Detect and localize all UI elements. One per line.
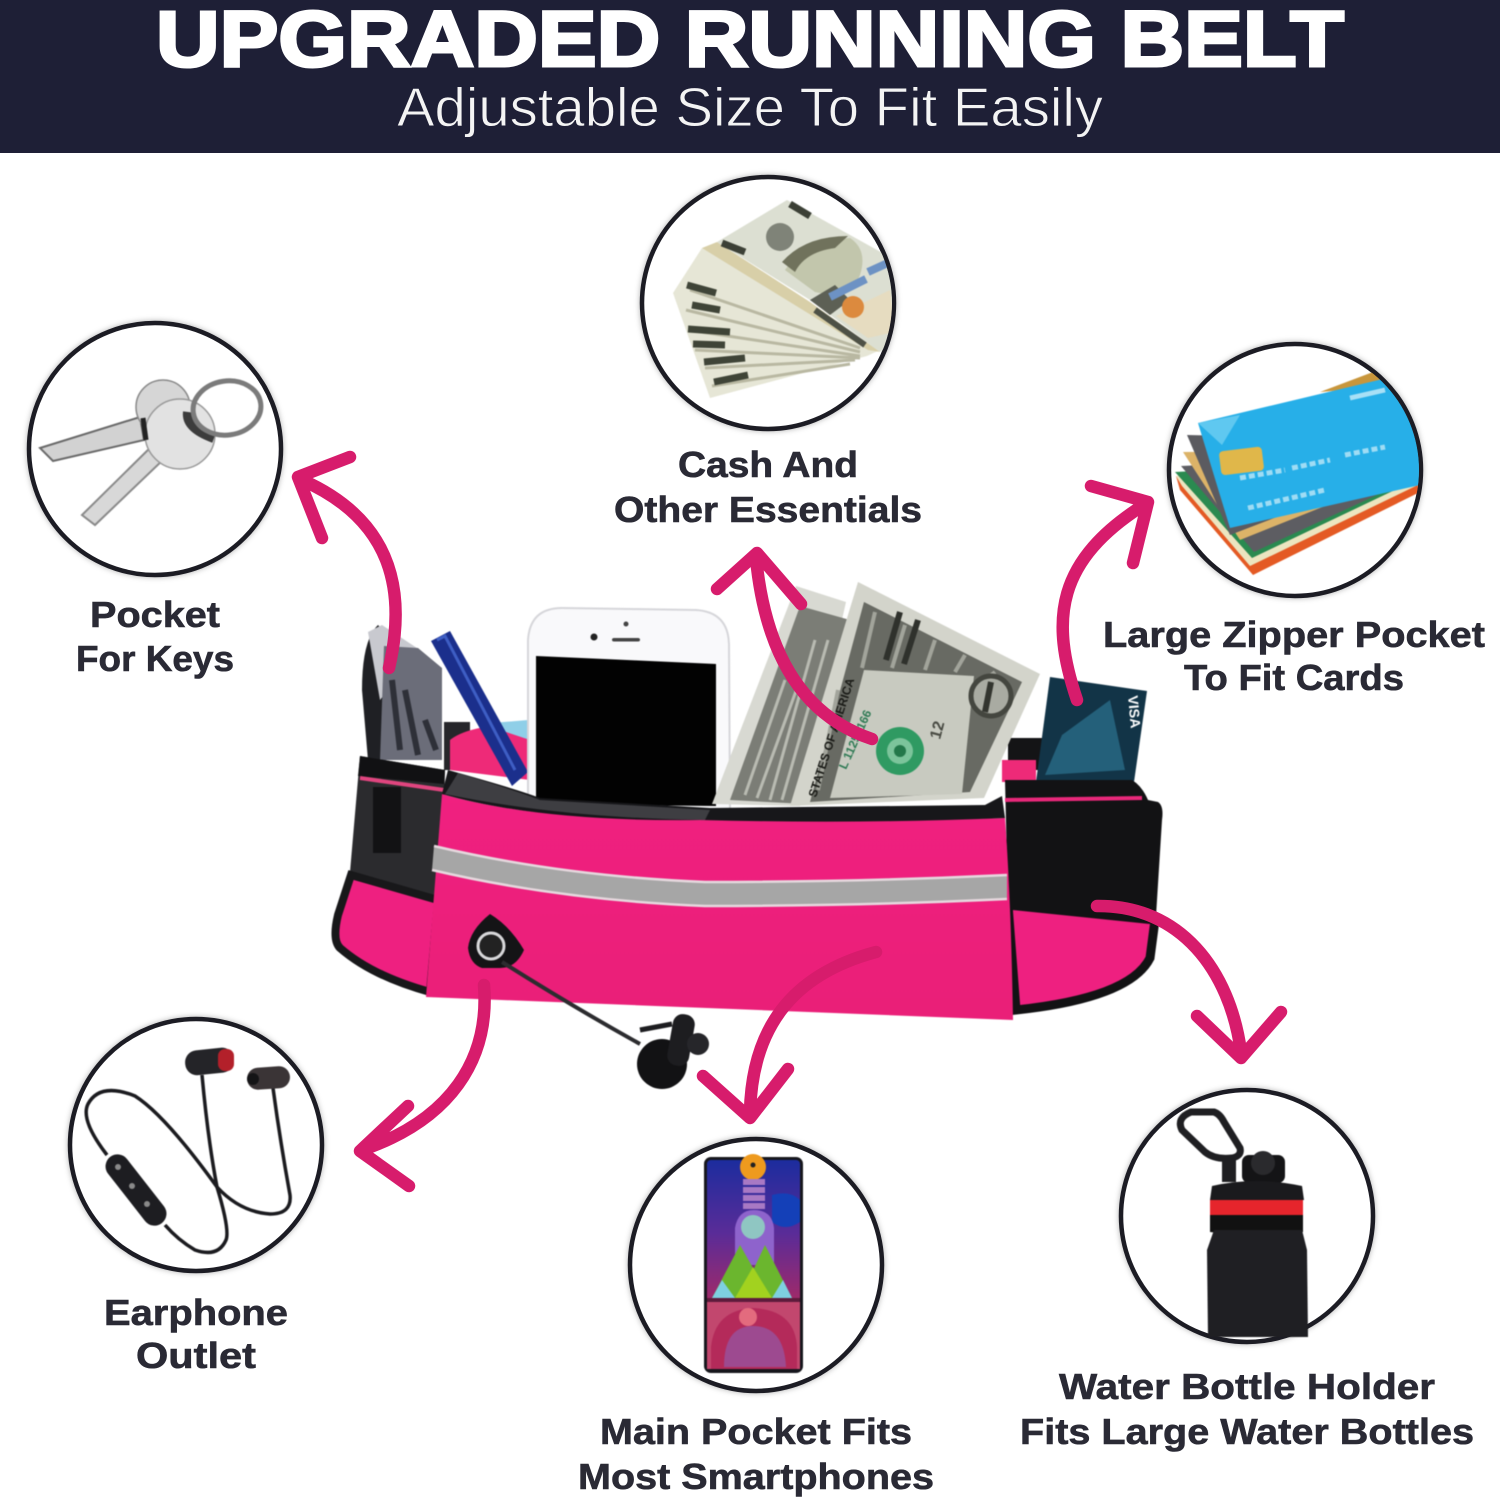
arrow: to cash: [717, 553, 872, 739]
front bill: [790, 582, 1040, 806]
back strap pieces: [444, 722, 470, 770]
back bill: [712, 586, 846, 806]
items sticking out of the belt: [362, 582, 1147, 810]
dollar bills: 12: [927, 719, 948, 741]
right card: [1036, 677, 1147, 782]
circle: cash: [642, 177, 894, 429]
icon: stack of cards: [1175, 372, 1425, 575]
icon: neckband earphones: [86, 1046, 291, 1252]
panel: water bottle: [1121, 1090, 1373, 1342]
arrow: to keys: [298, 457, 396, 668]
label: outlet: Outlet: [136, 1335, 256, 1376]
label: large zipper: Large Zipper Pocket: [1103, 614, 1485, 655]
pink and light-blue inner lip: [450, 724, 530, 780]
main pocket: [426, 794, 1013, 1020]
arrow: to smartphone: [703, 952, 876, 1118]
header banner: [0, 0, 1500, 153]
circle: keys: [29, 323, 281, 575]
label: cash: Cash And: [678, 444, 858, 485]
earphone port: [468, 914, 524, 968]
circle: smartphone: [630, 1139, 882, 1391]
running belt with contents: [335, 582, 1162, 1089]
blue pen: [431, 631, 528, 786]
left black strap: [350, 756, 445, 898]
arrow: to cards: [1063, 486, 1148, 700]
panel: smartphone: [630, 1139, 882, 1391]
icon: smartphone: [704, 1154, 803, 1373]
circle: cards: [1169, 344, 1421, 596]
zipper: [442, 770, 1005, 822]
icon: keys: [40, 377, 264, 525]
panel: keys: [29, 323, 281, 575]
dollar bills: STATES OF AMERICA: [806, 676, 857, 799]
arrow: to earphones: [360, 985, 485, 1186]
dollar bills: [712, 582, 1040, 806]
right pink lip: [1002, 760, 1036, 782]
panel: cash: [642, 177, 895, 429]
circle: water bottle: [1121, 1090, 1373, 1342]
arrow: to water bottle: [1097, 906, 1281, 1058]
label: main pocket: Main Pocket Fits: [600, 1411, 912, 1452]
label: most smartphones: Most Smartphones: [578, 1456, 934, 1497]
right black strap: [1005, 780, 1162, 916]
label: earphone: Earphone: [104, 1292, 288, 1333]
reflective strip: [432, 846, 1007, 906]
smartphone: [528, 608, 730, 810]
label: pocket: Pocket: [90, 594, 220, 635]
dollar bills: L 11259166: [836, 708, 875, 771]
icon: stack of banknotes: [673, 200, 895, 398]
panel: cards: [1169, 344, 1425, 596]
left cards: [362, 625, 442, 760]
label: for keys: For Keys: [76, 638, 234, 679]
right card: VISA: [1125, 695, 1144, 729]
panel: earphones: [70, 1019, 322, 1271]
label: water bottle holder: Water Bottle Holder: [1059, 1366, 1435, 1407]
icon: water bottle: [1180, 1112, 1308, 1337]
right lower wing: [1008, 905, 1155, 1010]
earphone cable and bud: [502, 962, 709, 1089]
label: essentials: Other Essentials: [614, 489, 922, 530]
label: to fit cards: To Fit Cards: [1184, 657, 1404, 698]
circle: earphones: [70, 1019, 322, 1271]
subtitle: Adjustable Size To Fit Easily: [397, 76, 1103, 138]
left lower wing: [335, 875, 438, 992]
label: fits large bottles: Fits Large Water Bottles: [1020, 1411, 1474, 1452]
